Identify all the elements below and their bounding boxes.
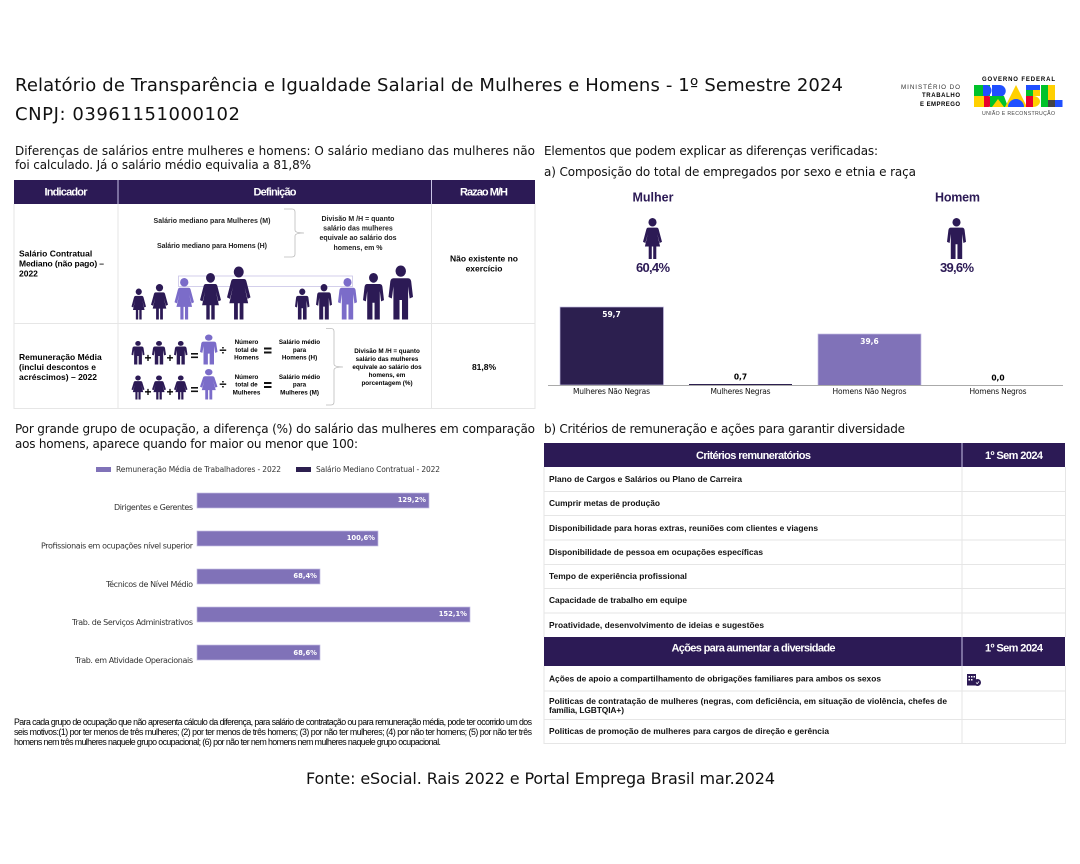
table header: Indicador xyxy=(44,186,88,198)
bar chart: occupation groups: 129,2% xyxy=(398,496,426,504)
criteria header: Critérios remuneratórios xyxy=(696,450,811,462)
row 2 men formula: ÷ xyxy=(219,342,227,358)
criteria rows: Cumprir metas de produção xyxy=(549,498,660,508)
icon: building with check xyxy=(967,674,981,686)
row 2 women formula: + xyxy=(166,385,174,399)
logo: governo federal brasil: UNIÃO E RECONSTRUÇÃO xyxy=(982,110,1055,117)
row 1 definition text: homens, em % xyxy=(333,245,383,252)
bar chart: occupation groups: Dirigentes e Gerentes xyxy=(114,503,193,512)
row 2 division note: porcentagem (%) xyxy=(361,380,413,387)
criteria header: 1º Sem 2024 xyxy=(985,450,1044,462)
row 2 division note: salário das mulheres xyxy=(356,356,419,363)
row 1 label xyxy=(19,248,104,278)
panel: woman share: Mulher xyxy=(632,190,674,204)
footnote: homens nem três mulheres naquele grupo ocupacional; (6) por não ter nem homens nem mulheres naquele grupo ocupacional. xyxy=(14,737,441,747)
legend: Remuneração Média de Trabalhadores - 2022 xyxy=(116,465,281,474)
row 2 men formula: Salário médio xyxy=(279,339,320,346)
actions header: 1º Sem 2024 xyxy=(985,642,1044,654)
actions rows: Ações de apoio a compartilhamento de obrigações familiares para ambos os sexos xyxy=(549,674,881,684)
panel: definition table xyxy=(14,180,535,408)
row 2 women formula: total de xyxy=(235,382,258,388)
criteria rows xyxy=(549,474,818,630)
row 1 people pictogram xyxy=(132,266,413,320)
row 2 men formula xyxy=(132,334,320,365)
panel: woman share xyxy=(632,190,674,275)
bar chart: composition by sex and race: Homens Negros xyxy=(970,387,1027,396)
criteria rows: Plano de Cargos e Salários ou Plano de Carreira xyxy=(549,474,742,484)
panel: man share: 39,6% xyxy=(940,260,974,275)
table header xyxy=(14,180,535,204)
heading: elementos xyxy=(544,144,916,179)
table header: Definição xyxy=(254,186,297,198)
panel: man share xyxy=(935,190,980,275)
bar chart: occupation groups: 152,1% xyxy=(439,610,467,618)
row 1 value: Não existente no xyxy=(450,254,518,264)
row 2 women formula: para xyxy=(293,382,307,388)
row 2 women formula: Mulheres (M) xyxy=(280,390,319,396)
title: Relatório de Transparência e Igualdade Salarial de Mulheres e Homens - 1º Semestre 2024 xyxy=(15,75,843,96)
table header: Razao M/H xyxy=(460,186,508,198)
bar chart: composition by sex and race: Mulheres Não Negras xyxy=(573,387,650,396)
criteria rows: Tempo de experiência profissional xyxy=(549,571,687,581)
logo: governo federal brasil: GOVERNO FEDERAL xyxy=(982,77,1055,83)
criteria rows: Disponibilidade para horas extras, reuniões com clientes e viagens xyxy=(549,523,818,533)
bar chart: occupation groups: Técnicos de Nível Médio xyxy=(105,579,193,589)
actions rows xyxy=(549,674,947,736)
row 2 division note: Divisão M /H = quanto xyxy=(354,348,420,355)
row 1 definition text: equivale ao salário dos xyxy=(319,235,397,242)
row 1 value: exercício xyxy=(466,264,502,274)
legend: Salário Mediano Contratual - 2022 xyxy=(316,465,440,474)
row 1 value xyxy=(450,254,518,274)
bar chart: occupation groups xyxy=(41,493,470,665)
bar chart: occupation groups: 68,6% xyxy=(293,649,317,657)
row 2 men formula: Número xyxy=(235,339,259,346)
bar chart: composition by sex and race: Homens Não Negros xyxy=(832,387,907,396)
actions rows: Politicas de contratação de mulheres (negras, com deficiência, em situação de violência, chefes de xyxy=(549,696,947,706)
heading: grande grupo de ocupação xyxy=(15,422,535,451)
row 2 women formula xyxy=(132,369,320,400)
criteria header xyxy=(544,443,1065,467)
row 2 men formula: Homens xyxy=(234,354,259,362)
row 2 women formula: Salário médio xyxy=(279,374,320,381)
footnote xyxy=(14,717,533,747)
bar chart: composition by sex and race: 59,7 xyxy=(602,310,621,319)
bar chart: occupation groups: Trab. de Serviços Administrativos xyxy=(71,618,193,627)
actions rows: Politicas de promoção de mulheres para cargos de direção e gerência xyxy=(549,726,829,736)
panel: woman share: 60,4% xyxy=(636,260,670,275)
row 1 definition text xyxy=(154,209,397,257)
heading: grande grupo de ocupação: aos homens, aparece quando for maior ou menor que 100: xyxy=(15,437,358,451)
legend xyxy=(96,465,440,474)
criteria rows: Disponibilidade de pessoa em ocupações específicas xyxy=(549,547,763,557)
actions header xyxy=(544,637,1065,666)
logo: ministry text: TRABALHO xyxy=(922,93,960,99)
row 1 definition text: Divisão M /H = quanto xyxy=(322,216,394,223)
panel: criteria table xyxy=(544,443,1066,744)
title xyxy=(15,75,843,125)
heading: critérios: b) Critérios de remuneração e ações para garantir diversidade xyxy=(544,422,905,436)
row 2 value: 81,8% xyxy=(472,362,496,372)
bar chart: composition by sex and race xyxy=(548,307,1063,396)
criteria rows: Proatividade, desenvolvimento de ideias e sugestões xyxy=(549,620,764,630)
title: CNPJ: 03961151000102 xyxy=(15,104,240,125)
heading: elementos: a) Composição do total de empregados por sexo e etnia e raça xyxy=(544,165,916,179)
row 1 definition text: Salário mediano para Homens (H) xyxy=(157,243,267,250)
panel: man share: Homem xyxy=(935,190,980,204)
bar chart: occupation groups: Trab. em Atividade Operacionais xyxy=(74,656,193,665)
row 1 definition text: salário das mulheres xyxy=(323,226,393,232)
logo: governo federal brasil xyxy=(974,77,1062,117)
source: Fonte: eSocial. Rais 2022 e Portal Emprega Brasil mar.2024 xyxy=(306,769,775,788)
row 2 men formula: + xyxy=(144,351,152,365)
row 1 label: 2022 xyxy=(19,268,38,278)
row 2 label: (inclui descontos e xyxy=(19,362,96,372)
row 2 women formula: ÷ xyxy=(219,376,227,392)
bar chart: occupation groups: 68,4% xyxy=(293,572,317,580)
bar chart: occupation groups: Profissionais em ocupações nível superior xyxy=(41,542,194,550)
row 2 men formula: para xyxy=(293,347,307,354)
row 2 label: Remuneração Média xyxy=(19,352,102,362)
logo: ministry text: MINISTÉRIO DO xyxy=(901,82,960,91)
heading: diferenças de salários: Diferenças de salários entre mulheres e homens: O salário mediano das mulheres não xyxy=(15,144,535,158)
heading: grande grupo de ocupação: Por grande grupo de ocupação, a diferença (%) do salário das mulheres em comparação xyxy=(15,422,535,436)
row 1 label: Salário Contratual xyxy=(19,248,92,258)
row 2 women formula: + xyxy=(144,385,152,399)
logo: ministry text: E EMPREGO xyxy=(920,102,960,108)
row 2 label: acréscimos) – 2022 xyxy=(19,372,97,382)
row 2 women formula: Número xyxy=(235,374,259,381)
heading: diferenças de salários: foi calculado. Já o salário médio equivalia a 81,8% xyxy=(15,158,311,172)
heading: elementos: Elementos que podem explicar as diferenças verificadas: xyxy=(544,144,878,158)
actions header: Ações para aumentar a diversidade xyxy=(672,642,836,654)
row 1 definition text: Salário mediano para Mulheres (M) xyxy=(154,218,270,225)
row 2 men formula: + xyxy=(166,351,174,365)
criteria rows: Capacidade de trabalho em equipe xyxy=(549,595,687,605)
row 2 division note: homens, em xyxy=(369,372,406,379)
footnote: Para cada grupo de ocupação que não apresenta cálculo da diferença, para salário de contratação ou para remuneração média, pode ter ocorrido um dos xyxy=(14,717,533,727)
row 2 women formula: Mulheres xyxy=(233,390,261,396)
row 2 men formula: total de xyxy=(235,347,258,354)
bar chart: composition by sex and race: 0,0 xyxy=(991,374,1005,382)
row 2 division note xyxy=(326,328,422,405)
row 1 label: Mediano (não pago) – xyxy=(19,258,104,268)
logo: ministry text xyxy=(901,82,960,108)
row 2 label xyxy=(19,352,102,382)
actions rows: família, LGBTQIA+) xyxy=(549,705,624,715)
row 2 division note: equivale ao salário dos xyxy=(352,364,422,371)
bar chart: composition by sex and race: Mulheres Negras xyxy=(710,387,771,396)
bar chart: composition by sex and race: 39,6 xyxy=(860,337,879,346)
bar chart: composition by sex and race: 0,7 xyxy=(734,372,747,382)
footnote: seis motivos:(1) por ter menos de três mulheres; (2) por ter menos de três homens; (3) por não ter mulheres; (4) por não ter homens; (5) por não ter três xyxy=(14,727,533,737)
heading: diferenças de salários xyxy=(15,144,535,172)
row 2 men formula: Homens (H) xyxy=(282,354,317,362)
bar chart: occupation groups: 100,6% xyxy=(347,534,375,542)
